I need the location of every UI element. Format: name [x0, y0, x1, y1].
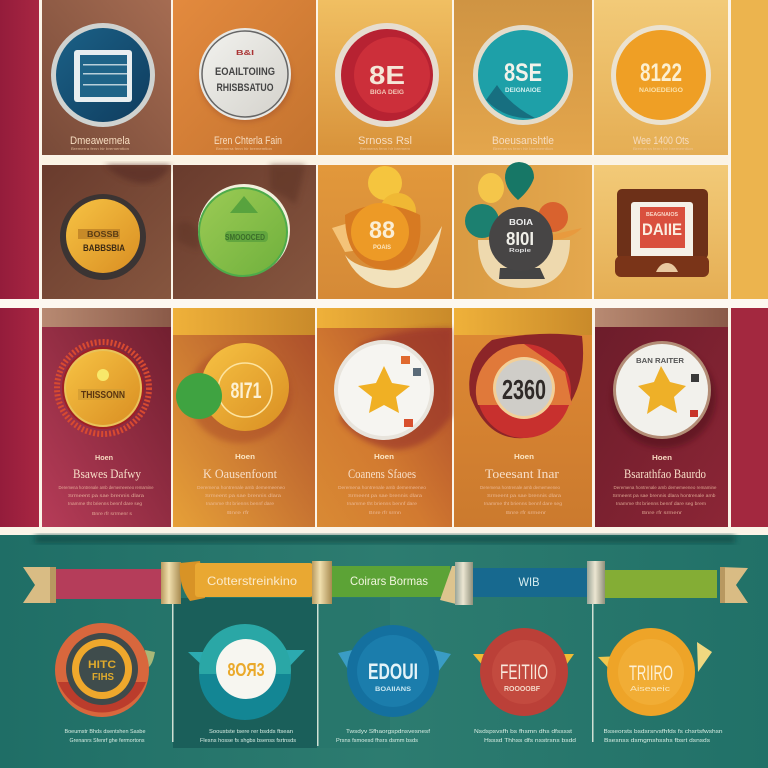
text block: Srmeent pa sae brennis dlara [205, 493, 282, 498]
caption: Bsseorsts bsdsrsrvsfhfds fs chsrtsfwshsn [604, 729, 723, 735]
panel: row 2 column 3 [318, 165, 452, 299]
icon: bowl with orange badge: POAIS [373, 245, 391, 251]
text block: Srmeent pa sae brennis dlara [68, 493, 145, 498]
text block: Deremena hontrenale amb dememeeneo [480, 485, 560, 490]
panel: row 2 column 5 [594, 165, 728, 299]
panel: bottom teal section [0, 535, 768, 768]
panel: row 3 column 3 [317, 308, 452, 527]
icon: red number badge [469, 334, 583, 438]
caption [633, 135, 693, 151]
caption: Boeumstr Bhds dsentshen Sasbe [64, 729, 146, 735]
text block: Srmeent pa sae brennis dlara [487, 493, 562, 498]
caption [70, 135, 131, 151]
panel: row 2 column 4 [454, 162, 592, 299]
icon: red badge: 8E [369, 60, 405, 90]
caption: Srnoss Rsl [358, 135, 412, 147]
icon: blue document badge [51, 23, 155, 127]
text block: Coanens Sfaoes [348, 467, 416, 481]
text block: Toeesant Inar [485, 467, 560, 481]
text block: Srmeent pa sae brennis dlara [348, 493, 423, 498]
text block: K Oausenfoont [203, 467, 278, 481]
panel: right bands [731, 0, 768, 527]
icon: framed sign: DAIIE [642, 220, 682, 239]
text block: Bnre rfr srmn [369, 510, 402, 515]
caption: Nsdspsvsfh bs fhsmn dhs dfsssst [474, 729, 573, 735]
caption: Bremerra fenn hir brememtion [71, 146, 129, 151]
text block: Bsawes Dafwy [73, 467, 142, 481]
divider: row 1 to row 2 [42, 157, 728, 164]
ribbon banner: Cotterstreinkino [207, 574, 297, 588]
text block: Deremena hontrenale amb dememeeneo remamine [614, 485, 717, 490]
panel: row 3 column 1 [42, 308, 171, 527]
text block [480, 454, 563, 515]
icon: orange badge with wings [598, 628, 712, 716]
icon: white round badge [199, 28, 292, 122]
caption: Bremerra fenn hir bremem [360, 146, 411, 151]
icon: gold badge with green ball [176, 343, 292, 443]
text block: Inamme tht brienns bennf dare seg [68, 501, 143, 506]
text block: Bnre rfr srmenr [642, 510, 683, 515]
caption [200, 729, 297, 744]
icon: gold seal badge: THISSONN [81, 390, 125, 401]
caption: Prsns fsmoesd fhsrs dsmm bsds [336, 738, 419, 744]
caption: Eren Chterla Fain [214, 135, 282, 147]
icon: orange badge with wings: Aiseaeic [630, 686, 671, 693]
icon: teal badge: DEIGNAIOE [505, 88, 541, 94]
text block: Bsarathfao Baurdo [624, 467, 706, 481]
panel: row 2 column 2 [173, 165, 316, 299]
icon: orange badge with wings: TRIIRO [629, 662, 673, 685]
text block [612, 455, 717, 515]
text block: Hoen [374, 454, 394, 461]
caption [604, 729, 723, 744]
text block: Bnre rfr srmenr [506, 510, 547, 515]
icon: dark globe with balloons [465, 162, 582, 288]
panel: left crimson band [0, 0, 39, 527]
caption [214, 135, 282, 151]
text block [58, 455, 154, 516]
panel: row 1 column 1 [42, 0, 171, 155]
text block: Bnre rfr [227, 510, 250, 515]
caption: Dmeawemela [70, 135, 131, 147]
icon: gold badge: BABBSBIA [83, 243, 125, 253]
text block [338, 454, 427, 515]
caption [64, 729, 146, 744]
caption: Flesns hosse fs shgbs bsenss fsrtnsds [200, 738, 297, 744]
icon: dark globe with balloons: 8I0I [506, 229, 534, 249]
text block: Deremena hontrenale amb dememeeneo [197, 485, 286, 490]
panel: row 1 column 4 [454, 0, 592, 155]
icon: blue badge: EDOUI [368, 659, 418, 684]
caption: Bremerra fenn hir brememtion [633, 146, 693, 151]
text block: Srmeent pa sae brennis dlara hontrenale amb [612, 493, 716, 498]
icon: dark globe with balloons: Ropie [509, 248, 531, 254]
icon: white star badge [612, 341, 716, 448]
caption: Bsesnss dsmgmshsshs fbsrt dsnsds [604, 738, 711, 744]
caption: Bremerra fenn hir brememtion [493, 146, 553, 151]
panel: row 3 column 5 [595, 308, 728, 527]
caption: Sooustste tsere rer bsdds ftsean [209, 729, 293, 735]
divider: full-width white band [0, 299, 768, 308]
icon: blue badge: BOAIIANS [375, 686, 412, 693]
text block: Inamme tht brienns bennf dare seg [484, 501, 563, 506]
panel: row 1 column 5 [594, 0, 728, 155]
icon: gold badge: BOSSB [87, 230, 119, 239]
icon: green badge: SMOOOCED [225, 233, 265, 242]
caption [474, 729, 576, 744]
text block: Bnre rfr srrmenr s [92, 511, 133, 516]
icon: teal badge: 8SE [504, 59, 542, 87]
icon: gold seal badge [57, 342, 149, 434]
panel: row 1 column 2 [173, 0, 316, 155]
icon: bowl with orange badge [332, 166, 442, 288]
icon: red badge: BIGA DEIG [370, 90, 404, 96]
icon: gold badge with green ball: 8I71 [230, 378, 262, 403]
icon: white star badge: BAN RAITER [636, 358, 684, 365]
icon: framed sign: BEAGNAIOS [646, 212, 679, 218]
caption [336, 729, 431, 744]
caption: Boeusanshtle [492, 135, 554, 147]
text block: Hoen [235, 454, 255, 461]
icon: red badge with yellow wings [473, 628, 574, 716]
icon: bowl with orange badge: 88 [369, 217, 395, 244]
icon: white round badge: B&I [236, 50, 254, 57]
icon: teal badge with white centre: 8ОЯ3 [228, 660, 264, 680]
panel: row 3 column 4 [454, 308, 592, 527]
icon: red badge with yellow wings: ROOOOBF [504, 686, 541, 693]
icon: orange and dark badge: HITC [88, 659, 116, 671]
icon: blue badge [338, 625, 451, 717]
caption: Hsssd Thhss dfs nsstrsns bsdd [484, 738, 576, 744]
icon: gold badge [60, 194, 146, 280]
panel: row 2 column 1 [42, 165, 171, 299]
icon: green badge [198, 184, 290, 276]
caption: Twsdyv Sfhaorgspdnsvesnesf [346, 729, 431, 735]
icon: teal badge [473, 25, 573, 125]
icon: white star badge [334, 328, 452, 450]
text block: Hoen [95, 455, 113, 462]
caption: Grenanrs Sfenrf ghe fermortons [70, 738, 145, 744]
text block: Inamme tht brienns bennf dare [347, 501, 418, 506]
text block: Hoen [652, 455, 672, 462]
text block [197, 454, 286, 515]
panel: row 1 column 3 [318, 0, 452, 155]
icon: orange badge [611, 25, 711, 125]
icon: orange badge: 8122 [640, 59, 682, 87]
text block: Hoen [514, 454, 534, 461]
icon: white round badge: RHISBSATUO [216, 82, 274, 94]
icon: dark globe with balloons: BOIA [509, 218, 533, 227]
ribbon banner [23, 561, 748, 605]
icon: red badge with yellow wings: FEITIIO [500, 661, 548, 684]
icon: white round badge: EOAILTOIING [215, 66, 275, 78]
text block: Deremena hontrenale amb dememeeneo remamine [58, 485, 154, 490]
icon: teal badge with white centre [188, 624, 305, 720]
caption: Bremerra fenn hir brememtion [216, 146, 272, 151]
icon: orange badge: NAIOEDEIGO [639, 88, 683, 94]
panel: row 3 column 2 [173, 308, 315, 527]
icon: orange and dark badge [55, 623, 155, 717]
icon: red number badge: 2360 [502, 374, 546, 405]
icon: red badge [335, 23, 439, 127]
icon: orange and dark badge: FIHS [92, 672, 114, 683]
text block: Inamme tht brienns bennf dare [206, 501, 275, 506]
text block: Deremena hontrenale amb dememeeneo [338, 485, 427, 490]
ribbon banner: Coirars Bormas [350, 574, 428, 588]
text block: Inamme tht brienns bennf dare seg brem [616, 501, 706, 506]
ribbon banner: WIB [518, 575, 540, 589]
icon: framed sign [615, 189, 709, 277]
caption: Wee 1400 Ots [633, 135, 689, 147]
